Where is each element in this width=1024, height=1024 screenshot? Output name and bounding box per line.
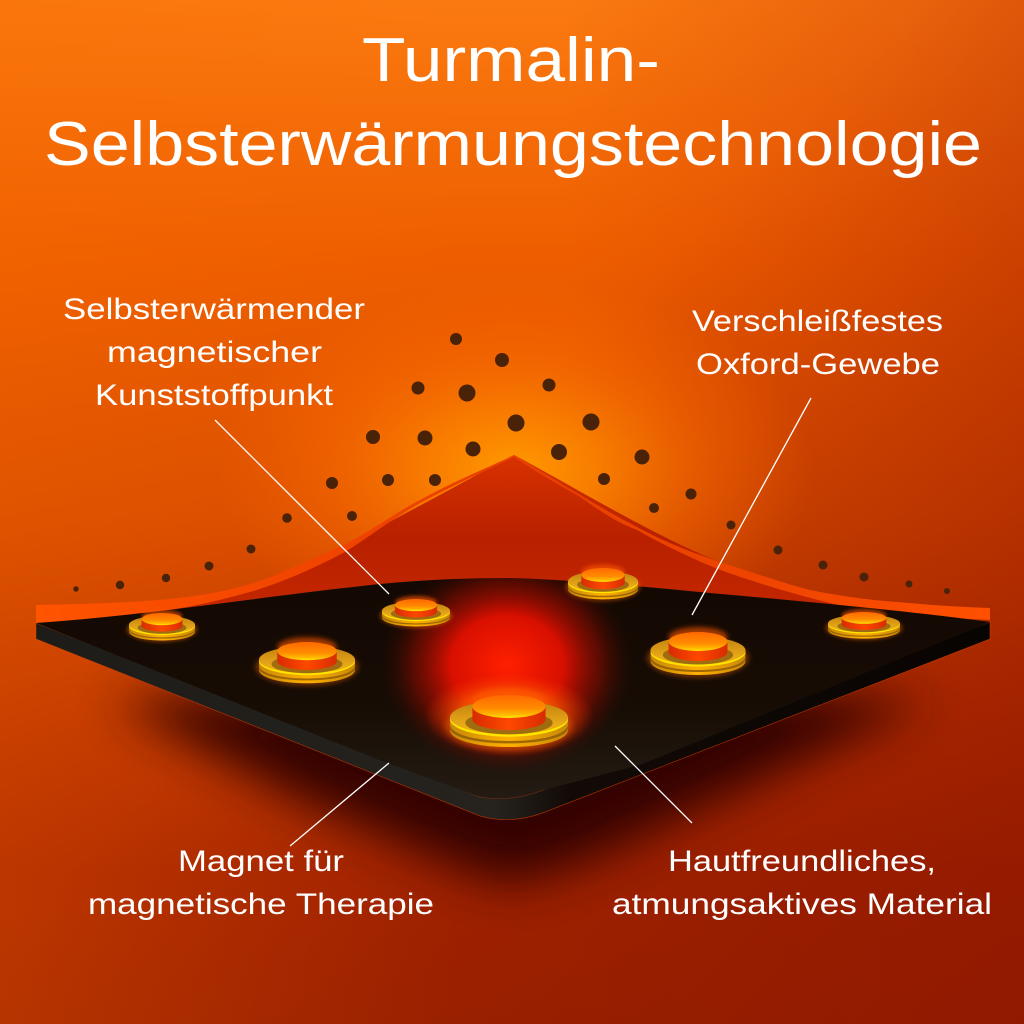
label: Verschleißfestes Oxford-Gewebe xyxy=(692,305,943,381)
leader lines xyxy=(215,398,811,846)
label: Selbsterwärmender magnetischer Kunststoffpunkt xyxy=(63,293,365,412)
rising heat dots xyxy=(73,333,950,594)
label: Magnet für magnetische Therapie: Magnet für xyxy=(178,845,344,878)
label: Hautfreundliches, atmungsaktives Material: atmungsaktives Material xyxy=(612,888,992,921)
fabric edge band xyxy=(36,455,990,623)
label: Magnet für magnetische Therapie: magnetische Therapie xyxy=(88,888,434,921)
label: Selbsterwärmender magnetischer Kunststoffpunkt: magnetischer xyxy=(107,336,322,369)
central red heat glow xyxy=(390,578,624,768)
puck: back left of centre xyxy=(379,596,453,628)
label: Hautfreundliches, atmungsaktives Material: Hautfreundliches, xyxy=(668,845,936,878)
puck: back centre xyxy=(565,564,641,602)
label: Selbsterwärmender magnetischer Kunststoffpunkt: Selbsterwärmender xyxy=(63,293,365,326)
label: Magnet für magnetische Therapie xyxy=(88,845,434,921)
puck: rear right xyxy=(825,609,903,641)
title xyxy=(44,26,982,179)
label: Verschleißfestes Oxford-Gewebe: Verschleißfestes xyxy=(692,305,943,338)
title: Turmalin- xyxy=(362,26,660,95)
label: Hautfreundliches, atmungsaktives Material xyxy=(612,845,992,921)
raised fabric underside xyxy=(36,455,990,623)
mat side edge xyxy=(36,622,990,820)
label: Verschleißfestes Oxford-Gewebe: Oxford-Gewebe xyxy=(696,348,940,381)
title: Selbsterwärmungstechnologie xyxy=(44,110,982,179)
label: Selbsterwärmender magnetischer Kunststoffpunkt: Kunststoffpunkt xyxy=(95,379,334,412)
puck: middle left xyxy=(255,637,359,686)
mat top surface xyxy=(36,578,990,798)
puck: rear left xyxy=(126,610,198,642)
shadow under the mat xyxy=(110,680,930,885)
puck: middle right xyxy=(647,627,749,678)
puck: front centre xyxy=(445,689,573,751)
